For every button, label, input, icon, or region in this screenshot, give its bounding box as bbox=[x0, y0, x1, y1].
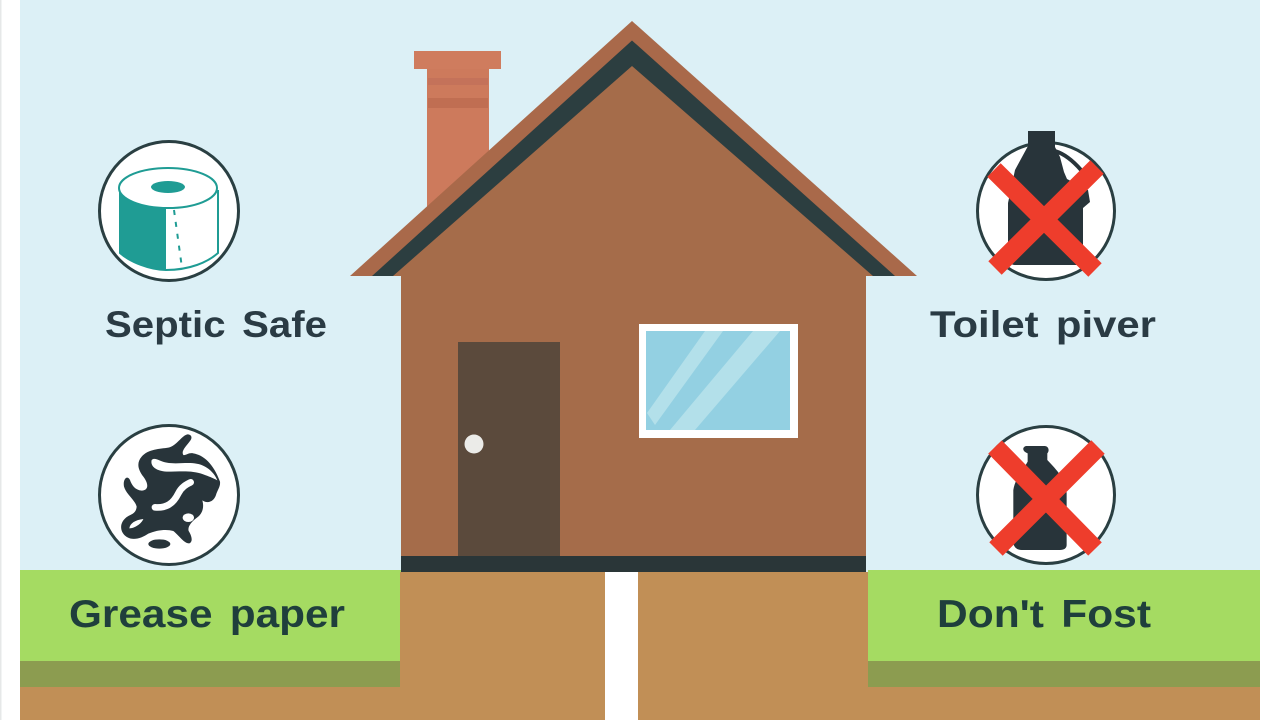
door bbox=[458, 342, 560, 557]
roof bbox=[350, 21, 917, 276]
label: Septic Safe: Septic Safe bbox=[105, 304, 327, 345]
label: Don't Fost: Don't Fost bbox=[937, 593, 1151, 636]
icon: toilet paper roll bbox=[100, 142, 238, 280]
label: Grease paper: Grease paper bbox=[69, 593, 345, 636]
chimney bbox=[414, 51, 501, 216]
icon: crossed-out jug bbox=[978, 131, 1114, 280]
label: Toilet piver: Toilet piver bbox=[930, 304, 1156, 345]
sky background bbox=[20, 0, 1260, 572]
drain pipe bbox=[605, 572, 638, 720]
icon: grease blob bbox=[100, 426, 238, 564]
ground: right grass bbox=[868, 570, 1260, 687]
window bbox=[639, 324, 798, 438]
ground: soil bbox=[20, 572, 1260, 720]
ground: left grass bbox=[20, 570, 401, 687]
house wall bbox=[401, 262, 866, 558]
house bbox=[350, 21, 917, 572]
icon: crossed-out bottle bbox=[978, 426, 1114, 564]
foundation bbox=[401, 556, 866, 572]
